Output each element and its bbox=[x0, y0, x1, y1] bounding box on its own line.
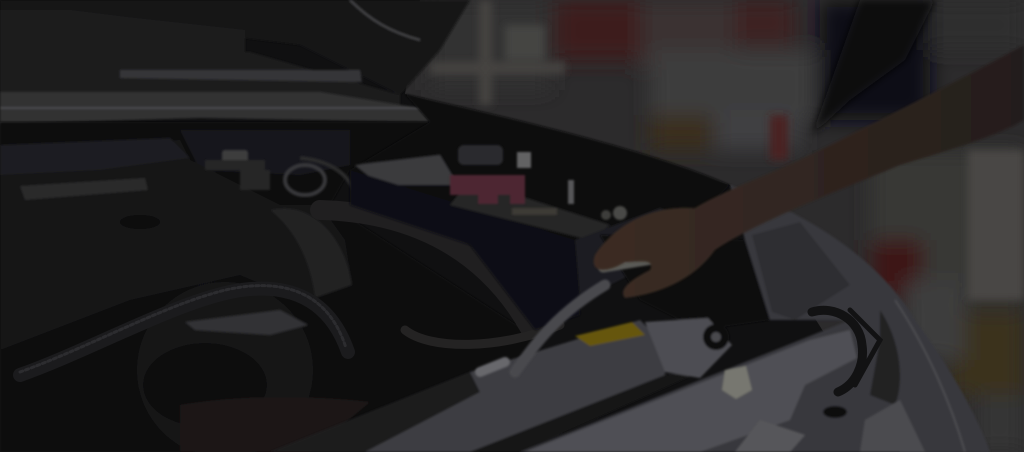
engine: dark engine bay and intake cover bbox=[0, 122, 540, 452]
battery tray bbox=[350, 94, 730, 330]
hose: corrugated black hose bbox=[20, 210, 560, 375]
hand tool: grey handle in the mechanic's hand bbox=[480, 260, 652, 372]
engine details: small parts behind the intake bbox=[205, 150, 354, 195]
car body: light grey front panel and radiator support bbox=[270, 185, 990, 452]
bracket: dark metal bracket on the front panel bbox=[812, 310, 880, 392]
battery terminal: red component bbox=[450, 145, 627, 220]
arm: mechanic's forearm and hand bbox=[594, 45, 1024, 298]
hood: raised bonnet bbox=[0, 0, 470, 124]
